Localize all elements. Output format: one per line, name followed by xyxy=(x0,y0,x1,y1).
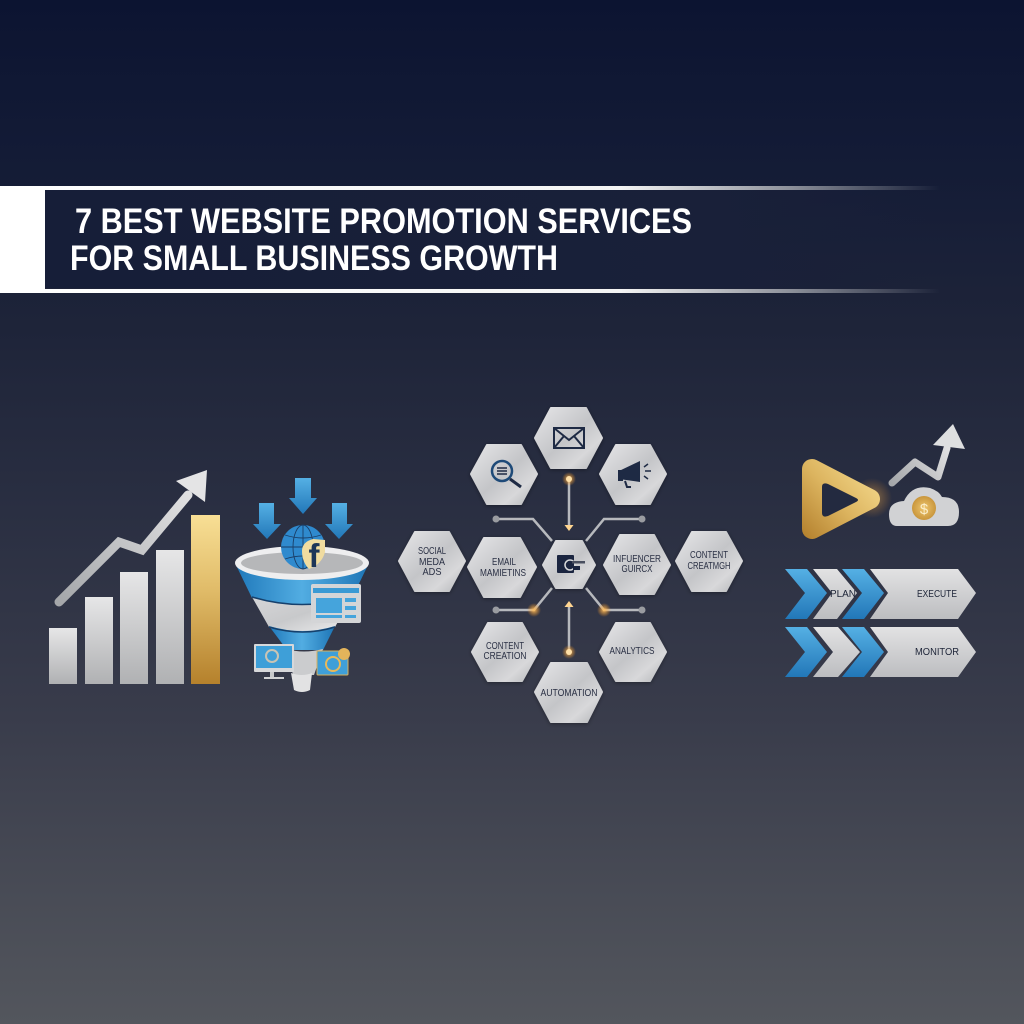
gold play icon xyxy=(812,469,892,529)
monitor icon xyxy=(254,644,294,679)
connector glows and nodes xyxy=(492,472,646,659)
hexagon: content creation right: CREATMGH xyxy=(688,561,730,572)
hexagon: email marketing: EMAIL xyxy=(492,557,516,568)
globe with f badge xyxy=(281,525,325,574)
hexagon: content creation: CREATION xyxy=(484,651,526,662)
connector lines xyxy=(496,479,642,652)
title text: 7 BEST WEBSITE PROMOTION SERVICES xyxy=(75,202,692,241)
hexagon: influencer: GUIRCX xyxy=(622,564,653,575)
hexagon: influencer xyxy=(604,535,670,594)
hexagon: email marketing xyxy=(468,538,536,597)
hexagon: content creation: CONTENT xyxy=(486,641,524,652)
label: plan: PLAN xyxy=(830,589,856,600)
hexagon: social media ads: MEDA xyxy=(419,557,445,568)
hexagon: megaphone icon xyxy=(600,445,666,504)
hexagon: analytics xyxy=(600,623,666,681)
browser window card xyxy=(311,584,361,623)
hexagon: automation xyxy=(535,663,602,722)
hexagon: automation: AUTOMATION xyxy=(540,688,598,699)
camera icon xyxy=(317,648,350,675)
funnel input arrows xyxy=(253,478,353,539)
title text: FOR SMALL BUSINESS GROWTH xyxy=(70,239,558,278)
globe with f badge: f xyxy=(308,537,320,574)
hexagon: central camera hub xyxy=(543,541,595,588)
growth arrow xyxy=(59,470,207,602)
process chevrons row 1 xyxy=(785,569,976,619)
rising trend arrow xyxy=(892,424,965,483)
cloud with dollar coin xyxy=(889,487,959,526)
hexagon: social media ads xyxy=(399,532,465,591)
hexagon: search icon xyxy=(471,445,537,504)
hexagon: analytics: ANALYTICS xyxy=(610,646,655,657)
hexagon: social media ads: ADS xyxy=(422,567,442,578)
hexagon: influencer: INFUENCER xyxy=(613,554,661,565)
cloud with dollar coin: $ xyxy=(920,501,929,518)
hexagon: content creation right xyxy=(676,532,742,591)
hexagon: social media ads: SOCIAL xyxy=(418,546,446,557)
title banner xyxy=(0,186,940,293)
process chevrons row 2 xyxy=(785,627,976,677)
hexagon: content creation xyxy=(472,623,538,681)
funnel illustration xyxy=(235,478,369,692)
hexagon: content creation right: CONTENT xyxy=(690,550,728,561)
funnel body xyxy=(235,546,369,692)
hexagon hub diagram xyxy=(399,408,742,722)
bar chart with growth arrow xyxy=(49,470,220,684)
label: execute: EXECUTE xyxy=(917,589,957,600)
label: monitor: MONITOR xyxy=(915,647,959,658)
hexagon: email icon xyxy=(535,408,602,468)
hexagon: email marketing: MAMIETINS xyxy=(480,568,526,579)
